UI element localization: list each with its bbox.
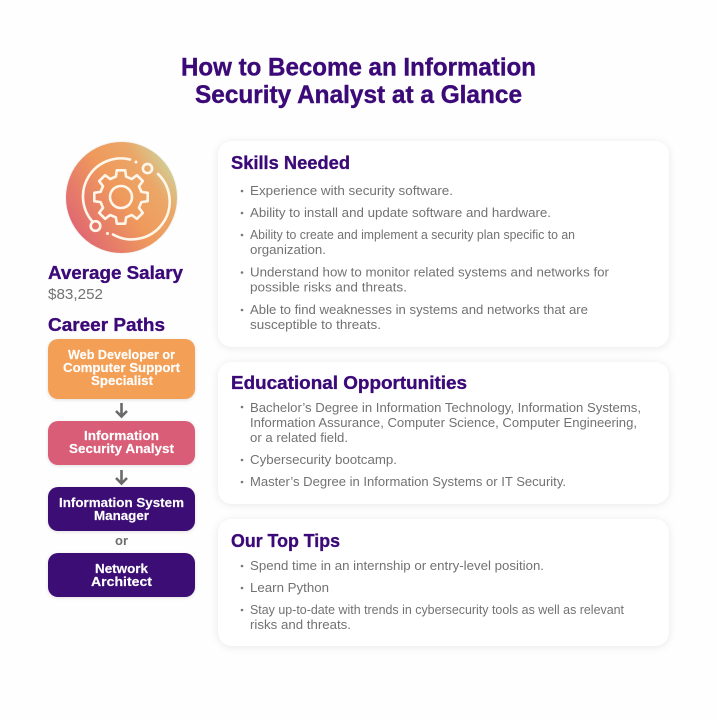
career box: network architect: Architect (91, 575, 153, 589)
title (181, 54, 536, 109)
title: Security Analyst at a Glance (195, 81, 522, 109)
arrow (116, 470, 127, 484)
list: tips (241, 558, 624, 632)
list: tips: risks and threats. (250, 617, 351, 632)
career box: network architect (48, 553, 195, 597)
heading: our top tips: Our Top Tips (231, 530, 340, 551)
career paths heading: Career Paths (48, 314, 165, 335)
arrow (116, 403, 127, 416)
career box: information security analyst (48, 421, 195, 465)
list: skills: Ability to install and update software and hardware. (250, 205, 551, 220)
list: tips: Stay up-to-date with trends in cybersecurity tools as well as relevant (250, 602, 624, 617)
career box: network architect: Network (95, 562, 148, 576)
career box: information system manager: Information System (59, 496, 184, 510)
career box: web developer: Web Developer or (68, 348, 175, 362)
list: education (241, 400, 641, 489)
career box: information system manager: Manager (94, 509, 149, 523)
panel: our top tips (218, 519, 669, 646)
average salary: $83,252 (48, 287, 103, 303)
list: tips: Learn Python (250, 580, 329, 595)
list: skills (241, 183, 610, 332)
career box: information security analyst: Information (84, 429, 159, 443)
heading: educational opportunities: Educational Opportunities (231, 372, 467, 393)
career box: information security analyst: Security Analyst (69, 442, 175, 456)
panel: educational opportunities (218, 362, 669, 504)
career box: web developer (48, 339, 195, 399)
list: education: Information Assurance, Computer Science, Computer Engineering, (250, 415, 637, 430)
average salary (48, 262, 184, 303)
career box: information system manager (48, 487, 195, 531)
list: skills: Understand how to monitor related systems and networks for (250, 264, 610, 280)
heading: skills needed: Skills Needed (231, 152, 350, 173)
panel: skills needed (218, 141, 669, 347)
average salary: Average Salary (48, 262, 184, 283)
list: tips: Spend time in an internship or entry-level position. (250, 558, 544, 573)
icon: gear in gradient circle (66, 142, 178, 254)
or label: or (115, 534, 128, 548)
list: education: Bachelor’s Degree in Information Technology, Information Systems, (250, 400, 641, 415)
list: education: or a related field. (250, 430, 348, 445)
list: education: Cybersecurity bootcamp. (250, 452, 397, 467)
list: skills: Experience with security software. (250, 183, 453, 198)
list: skills: organization. (250, 242, 326, 257)
list: skills: Ability to create and implement a security plan specific to an (250, 227, 575, 242)
career box: web developer: Computer Support (63, 361, 181, 375)
title: How to Become an Information (181, 54, 536, 82)
list: education: Master’s Degree in Information Systems or IT Security. (250, 474, 566, 489)
list: skills: possible risks and threats. (250, 280, 407, 294)
list: skills: Able to find weaknesses in systems and networks that are (250, 302, 588, 317)
list: skills: susceptible to threats. (250, 317, 381, 332)
career box: web developer: Specialist (91, 374, 154, 388)
